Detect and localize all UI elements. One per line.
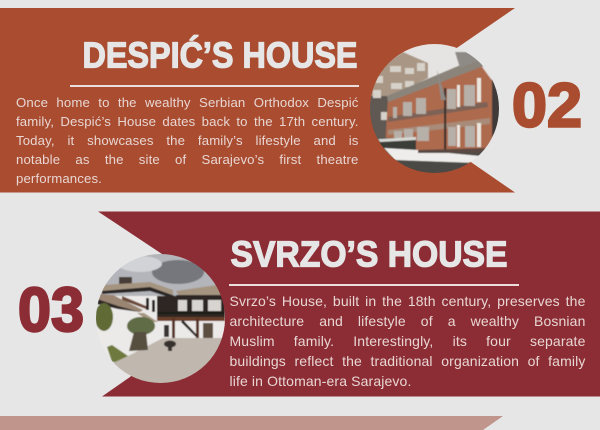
photo: Despić's House brick building — [370, 44, 499, 173]
text block: Despić's House description: Today, it showcases the family’s lifestyle and is — [16, 133, 358, 148]
panel background shape — [0, 8, 515, 192]
panel: Despić's House — [0, 8, 515, 192]
photo: Svrzo's House courtyard — [96, 254, 225, 383]
text block: Svrzo's House description — [230, 292, 586, 389]
heading rule — [70, 85, 359, 87]
text block: Despić's House description: Once home to the wealthy Serbian Orthodox Despić — [16, 95, 358, 110]
text block: Svrzo's House description: Muslim family. Interestingly, its four separate — [230, 332, 586, 348]
text block: Svrzo's House description: life in Ottoman-era Sarajevo. — [230, 372, 411, 388]
panel: Svrzo's House — [96, 212, 600, 396]
text block: Svrzo's House description: Svrzo’s House, built in the 18th century, preserves the — [230, 292, 586, 308]
text block: Despić's House description: notable as the site of Sarajevo’s first theatre — [16, 152, 358, 167]
text block: Svrzo's House description: architecture and lifestyle of a wealthy Bosnian — [230, 312, 586, 328]
text block: Despić's House description — [16, 95, 358, 186]
panel background shape — [98, 212, 600, 396]
heading rule — [229, 284, 519, 286]
text block: Despić's House description: family, Despić’s House dates back to the 17th century. — [16, 114, 358, 129]
text block: Despić's House description: performances. — [16, 171, 102, 186]
panel: next section, partly visible — [0, 416, 503, 430]
text block: Svrzo's House description: buildings reflect the traditional organization of family — [230, 352, 586, 368]
